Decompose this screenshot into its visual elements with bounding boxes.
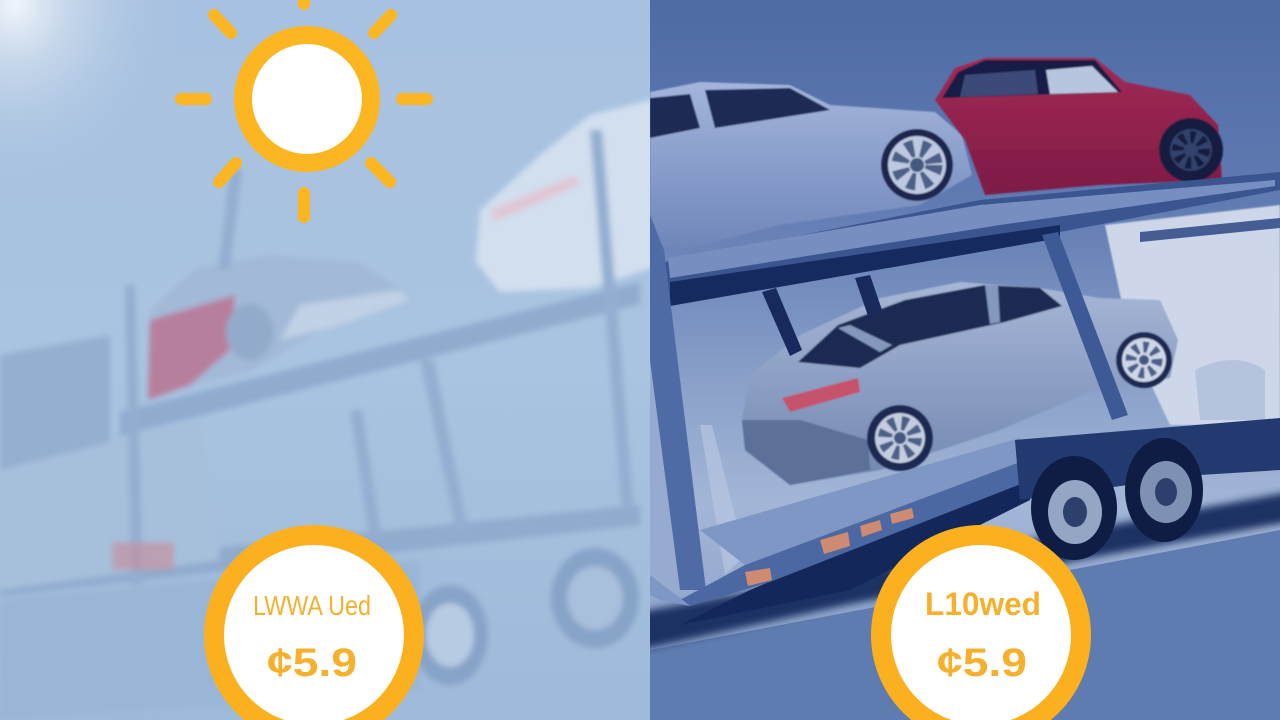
faded white car: [476, 95, 670, 292]
upper blue car: [650, 82, 972, 248]
badge price left: ¢5.9: [267, 641, 357, 685]
sun disc: [243, 35, 371, 163]
icon: sun: [181, 0, 427, 217]
truck wheels: [1031, 456, 1117, 560]
ramp lights: [745, 508, 914, 586]
faded red and grey car: [150, 255, 410, 395]
sun rays: [181, 0, 427, 217]
light left column backing: [650, 362, 672, 528]
badge label left: LWWA Ued: [253, 590, 371, 621]
axles: [1015, 418, 1280, 500]
badge price right: ¢5.9: [937, 641, 1027, 685]
badge: left price: [214, 535, 414, 720]
faded wheels: [14, 564, 416, 606]
lower car front wheel: [867, 405, 933, 471]
lower car rear wheel: [1116, 332, 1172, 388]
faded truck: [0, 95, 670, 720]
upper deck: [665, 172, 1280, 305]
faded posts: [125, 130, 634, 585]
red car wheel: [1159, 118, 1223, 182]
truck cab: [1105, 205, 1280, 425]
faded deck: [120, 282, 640, 436]
lower ramp: [682, 484, 1030, 624]
upper blue car wheel: [881, 129, 953, 201]
lower car: [742, 282, 1178, 485]
upper red car: [935, 58, 1223, 195]
road: [650, 530, 1280, 720]
panel: left faded side: [0, 0, 670, 720]
struts: [1042, 232, 1128, 420]
badge: right price: [881, 535, 1081, 720]
badge label right: L10wed: [925, 586, 1041, 622]
panel: right truck photo: [640, 0, 1280, 720]
